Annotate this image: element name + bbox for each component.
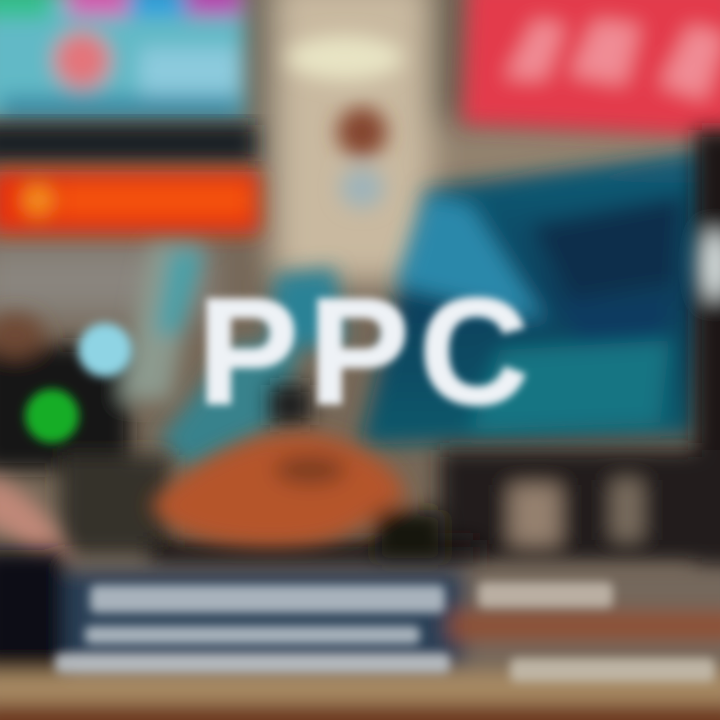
wall lamp and ornament — [287, 36, 403, 208]
icon: light blue dot — [78, 323, 132, 377]
panel: top right red sign — [462, 0, 720, 138]
dark band under screen — [0, 125, 255, 161]
panel: keyboard — [0, 550, 720, 720]
panel: orange red sign — [0, 170, 260, 234]
panel: top left screen — [0, 0, 245, 120]
dark right edge — [440, 130, 720, 580]
hand — [0, 433, 445, 575]
keyboard blurred text strokes — [55, 582, 715, 682]
title: PPC: PPC — [198, 267, 528, 435]
panel: monitor — [160, 150, 712, 470]
left dark equipment — [0, 245, 480, 570]
icon: green dot — [25, 389, 79, 443]
